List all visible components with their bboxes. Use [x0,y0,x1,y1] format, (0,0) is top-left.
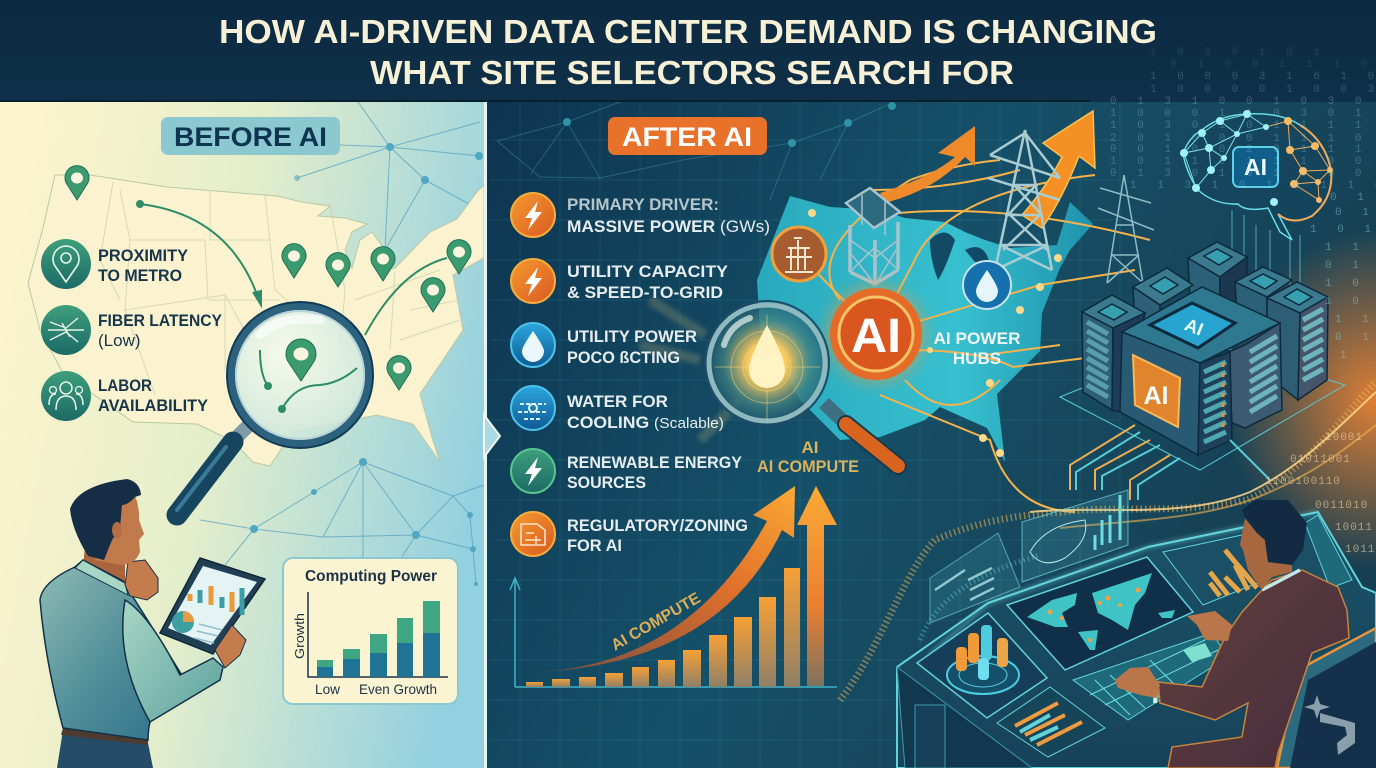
label: AI power hubs: HUBS [953,349,1001,368]
sleeve [123,600,223,722]
icon: AI neural brain [1180,110,1333,300]
panel: after AI background [486,100,1376,768]
text: binary stream: 1100100110 [1265,476,1341,488]
face [95,495,144,565]
list: after AI factors [511,193,770,556]
panel: binary data backdrop: 1 0 3 0 1 0 1 [1150,47,1327,59]
arrow: curved growth [540,486,795,672]
map: US land before AI [28,175,484,466]
item: water for cooling [511,386,724,432]
panel: before AI background [0,100,484,768]
text: binary stream: 10011 [1335,522,1373,534]
text: binary stream: 01011001 [1290,454,1351,466]
axis labels: Low [315,681,341,697]
panel: binary data backdrop: 0 1 [1335,332,1376,344]
screen: orange bars [997,687,1105,757]
rack: middle right [1228,323,1282,428]
wave: flowing data stream [840,381,1376,700]
panel: binary data backdrop: 0 1 [1330,192,1371,204]
screen: bar chart [1163,535,1265,605]
item: utility capacity: & SPEED-TO-GRID [567,283,723,302]
chart: computing power [283,558,458,704]
collar [75,560,128,595]
illustration: site selector with tablet [40,479,265,768]
icon: magnifier with glowing drop [640,300,898,466]
icon: transmission tower rear [1098,175,1154,283]
list: before AI factors [41,239,223,421]
item: utility power [511,323,697,367]
icon: transmission tower front [988,130,1060,270]
hand on chin [125,560,158,600]
arrows: rising power demand [880,111,1095,228]
cuff [1155,683,1157,703]
text: binary stream: 1011 [1345,544,1375,556]
item: regulatory zoning: REGULATORY/ZONING [567,516,748,535]
axis labels: Even Growth [359,681,437,697]
panel: after AI badge: AFTER AI [622,122,752,152]
map: after AI power network over US [757,160,1150,512]
item: fiber latency [41,305,223,355]
axis label: Growth [292,613,307,659]
rack: left [1082,295,1145,412]
item: utility capacity: UTILITY CAPACITY [567,262,729,281]
badge: before AI: BEFORE AI [174,122,327,152]
icon: AI badge on map [826,284,926,384]
item: renewable energy [511,449,743,493]
trousers [57,730,153,768]
upper hand [1187,611,1232,641]
chart: AI compute exponential growth [510,438,859,687]
rack: back left [1133,268,1193,335]
item: water for cooling: COOLING (Scalable) [567,413,724,432]
chair [1277,628,1376,768]
item: primary driver [511,193,770,237]
screen: world map [1007,557,1193,670]
illustration: analyst at console [1115,500,1376,768]
rack: main AI block [1120,287,1280,455]
screen: hologram bars [917,613,1047,718]
arrow: center to northeast [365,258,447,335]
rack: right [1267,282,1328,400]
item: regulatory zoning: FOR AI [567,536,622,555]
chip: AI processor: AI [1182,314,1206,340]
chip: AI processor [1150,303,1235,348]
text: binary stream [1265,432,1375,556]
plate: AI orange: AI [1144,382,1168,410]
label: AI compute above arrows: AI [802,438,818,457]
label: AI power hubs [934,329,1020,368]
rack: back center [1188,242,1247,330]
suit [1158,570,1349,768]
label: AI compute above arrows [757,438,859,476]
panel: binary data backdrop: 1 1 [1335,314,1376,326]
item: utility capacity [511,259,729,303]
shirt [40,560,185,740]
item: labor availability: LABOR [98,376,152,395]
rack: back right [1235,267,1292,330]
title: HOW AI-DRIVEN DATA CENTER DEMAND IS CHANGING [219,13,1157,50]
item: labor availability [41,371,209,421]
icon: AI badge on map: AI [851,310,901,363]
lower hand [1115,667,1160,698]
chair inner [1290,642,1376,768]
icon: substation structure [846,188,900,284]
connectors: circuit traces to servers [1070,425,1270,500]
collar [1262,570,1300,590]
item: proximity to metro [41,239,189,289]
item: water for cooling: WATER FOR [567,392,668,411]
arrow: straight growth [797,486,837,686]
item: regulatory zoning [511,512,748,556]
tablet [160,558,265,654]
item: primary driver: MASSIVE POWER (GWs) [567,217,770,236]
panel: binary data backdrop [1110,47,1376,362]
item: utility power: UTILITY POWER [567,327,697,346]
item: proximity to metro: PROXIMITY [98,246,189,265]
label: AI brain badge: AI [1244,154,1267,180]
screen: side panel [1305,515,1352,588]
item: proximity to metro: TO METRO [98,266,182,285]
icon: magnifier over map [177,302,373,515]
plate: AI orange [1133,355,1180,427]
ear [112,522,122,538]
item: renewable energy: SOURCES [567,473,646,492]
badge: before AI [161,117,340,155]
hair [70,479,141,560]
axis labels [315,681,437,697]
item: fiber latency: FIBER LATENCY [98,311,223,330]
label: AI brain badge [1233,147,1278,187]
item: utility power: POCO ßCTING [567,348,680,367]
panel: binary data backdrop: 0 1 [1335,207,1376,219]
icon: magnifier pin [286,339,316,381]
illustration: AI data center servers [1060,242,1345,470]
screen: keypad [1073,633,1228,720]
divider: before to after [484,102,500,768]
item: fiber latency: (Low) [98,331,141,350]
label: AI compute on curve: AI COMPUTE [608,590,704,654]
icon: water badge on map [963,261,1011,309]
text: binary stream: 10001 [1325,432,1363,444]
header band [0,0,1376,102]
belt [61,728,148,745]
panel: holographic display [1022,490,1128,582]
face [1240,518,1292,590]
chart title: Computing Power [305,568,437,585]
label: AI power hubs: AI POWER [934,329,1020,348]
hair [1242,500,1307,565]
hand on tablet [215,625,246,668]
item: renewable energy: RENEWABLE ENERGY [567,453,743,472]
icons: site pins on map [65,166,471,390]
title [219,13,1157,91]
text: binary stream: 0011010 [1315,500,1368,512]
item: primary driver: PRIMARY DRIVER: [567,195,719,214]
item: labor availability: AVAILABILITY [98,396,209,415]
title: WHAT SITE SELECTORS SEARCH FOR [370,54,1014,91]
neck [83,545,125,585]
panel: left holographic stripes [930,533,1020,623]
label: AI compute above arrows: AI COMPUTE [757,457,859,476]
icon: utility badge on map [772,227,826,281]
arrow: west to center [137,201,261,305]
panel: control console desk [897,512,1376,768]
panel: after AI badge [608,117,767,155]
panel: binary data backdrop: 1 [1340,350,1354,362]
icon: logo watermark [1304,695,1355,755]
